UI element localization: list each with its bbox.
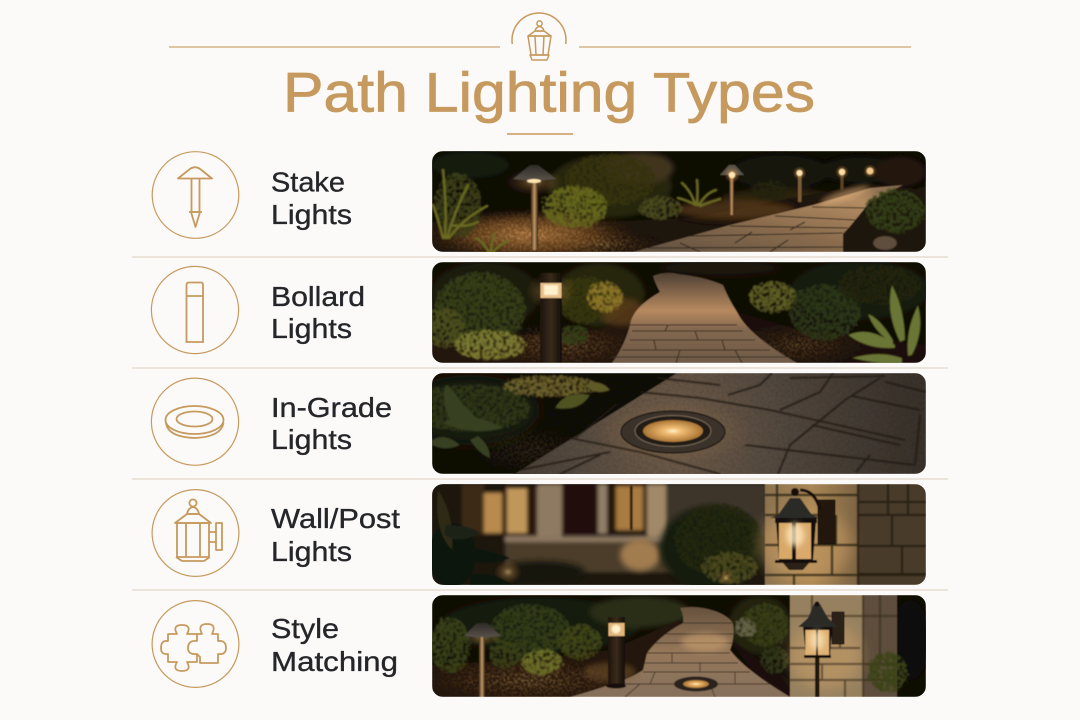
photo: bollard lights path [425,260,930,369]
photo: combined lights path [420,595,930,704]
icon: lantern emblem [512,13,566,60]
row: bollard lights [151,260,930,369]
header rule left [169,46,500,48]
label: stake lights: Stake [271,166,345,198]
label: in-grade lights: In-Grade [271,392,392,423]
row: in-grade lights [151,373,926,475]
label: bollard lights: Lights [271,313,352,344]
photo: stake lights path [432,151,926,252]
photo: wall lantern by pier [428,484,926,590]
header rule right [579,46,911,48]
label: bollard lights: Bollard [271,281,365,312]
label: style matching: Matching [271,646,398,677]
icon: bollard lamp [606,617,626,688]
row: style matching [152,595,930,704]
row dividers [132,257,948,590]
photo: in-grade lights paving [400,373,926,475]
label: style matching: Style [271,613,339,644]
infographic [132,12,948,697]
row: stake lights [152,151,926,263]
icon: puzzle pieces [152,601,239,687]
label: wall/post lights: Wall/Post [271,503,400,534]
icon: in-grade disc [151,378,239,465]
label: in-grade lights: Lights [271,424,352,455]
header [169,13,911,134]
title underline [507,133,573,135]
label: wall/post lights: Lights [271,536,352,567]
label: stake lights: Lights [271,199,352,230]
icon: post lantern [798,602,844,697]
icon: bollard [151,266,239,354]
title: Path Lighting Types [283,60,815,124]
stone pier [789,595,897,697]
icon: in-grade lamp [674,676,718,692]
icon: stake lamps [504,164,877,250]
icon: bollard lamp [528,272,574,363]
row: wall/post lights [152,484,926,590]
icon: stake lamp [464,623,501,697]
icon: in-grade fixture [602,410,728,454]
icon: wall lantern [152,490,239,576]
icon: stake light [152,152,239,238]
icon: wall lantern photo [770,488,835,570]
stone pier [759,484,926,585]
